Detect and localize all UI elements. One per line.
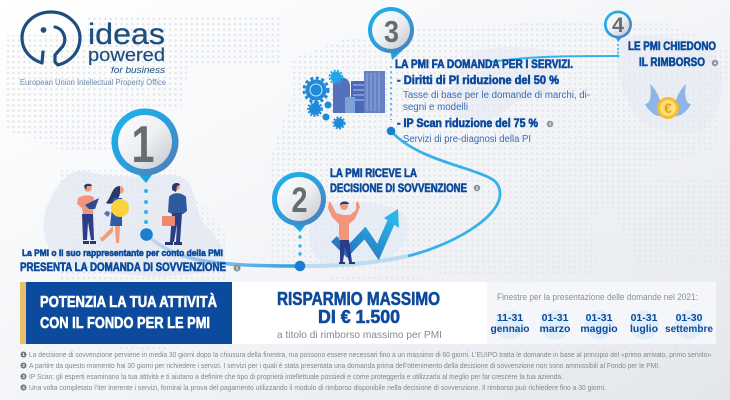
panel: maximum saving: a titolo di rimborso massimo per PMI xyxy=(277,329,442,341)
note badge 4: 4 xyxy=(714,61,717,66)
pin 3 xyxy=(368,7,414,60)
note badge 2 xyxy=(474,185,480,191)
date: settembre: 01-30 xyxy=(676,312,703,324)
footnote 3: 3 xyxy=(22,374,25,379)
step 2 text xyxy=(330,168,480,195)
logo wordmark: ideas xyxy=(88,18,165,51)
step 3 text: Servizi di pre-diagnosi della PI xyxy=(403,134,531,145)
note badge 1: 1 xyxy=(236,266,239,271)
date: luglio: 01-31 xyxy=(631,312,658,324)
date: maggio: maggio xyxy=(580,323,618,335)
pin 2: 2 xyxy=(292,181,308,220)
step 4 text xyxy=(628,41,718,69)
pin 3 connector xyxy=(387,66,395,135)
growth arrow xyxy=(334,209,399,252)
step 1 text: La PMI o il suo rappresentante per conto della PMI xyxy=(22,248,223,259)
panel: headline banner xyxy=(20,282,232,344)
step 3 text: - Diritti di PI riduzione del 50 % xyxy=(397,75,559,87)
logo xyxy=(20,12,166,87)
pin 2 xyxy=(272,172,326,232)
panel: application windows xyxy=(487,282,716,344)
pin 4: 4 xyxy=(612,14,624,37)
step 4 text: LE PMI CHIEDONO xyxy=(628,41,716,53)
step 3 text: Tasse di base per le domande di marchi, di- xyxy=(403,90,590,101)
footnote 1: 1 xyxy=(22,352,25,357)
panel: maximum saving: DI € 1.500 xyxy=(318,306,400,327)
step 4 text: IL RIMBORSO xyxy=(639,57,705,69)
step 3 text: segni e modelli xyxy=(403,102,468,113)
growth illustration xyxy=(328,201,399,264)
footnote 2: A partire da questo momento hai 30 giorni per richiedere i servizi. I servizi per i quali è stata presentata una domanda prima dell’ottenimento della decisione di sovvenzione non sono ammissibili al Fondo per le PMI. xyxy=(29,361,660,370)
date: settembre: settembre xyxy=(665,323,713,335)
pin 4 connector xyxy=(616,44,620,58)
panel: maximum saving xyxy=(232,282,487,344)
note badge 1 xyxy=(234,264,240,272)
person with briefcase xyxy=(162,183,187,244)
panel: maximum saving: RISPARMIO MASSIMO xyxy=(277,288,440,309)
people illustration xyxy=(77,183,187,244)
date: marzo xyxy=(540,310,570,340)
date: maggio xyxy=(580,310,618,340)
coin and laurel icon xyxy=(645,84,691,119)
footnotes xyxy=(20,350,713,392)
logo: powered xyxy=(88,44,165,65)
footnote 2: 2 xyxy=(22,363,25,368)
logo: for business xyxy=(111,65,165,76)
pale blobs xyxy=(43,35,723,276)
person with clipboard xyxy=(77,184,99,244)
note badge 2: 2 xyxy=(476,186,479,191)
gears xyxy=(304,70,345,129)
date: settembre xyxy=(665,310,713,340)
step 1 text xyxy=(20,248,240,274)
person with light bulb xyxy=(99,186,129,243)
note badge 3: 3 xyxy=(549,122,552,127)
flexing man xyxy=(328,201,360,264)
step 2 text: LA PMI RICEVE LA xyxy=(330,168,417,180)
pin 3: 3 xyxy=(384,14,399,49)
footnote 4: 4 xyxy=(22,385,25,390)
date: marzo: marzo xyxy=(540,323,570,335)
date: gennaio: gennaio xyxy=(490,323,530,335)
note badge 3 xyxy=(547,121,553,127)
pin 1: 1 xyxy=(132,116,154,174)
panel: headline banner: POTENZIA LA TUA ATTIVITÀ xyxy=(40,292,217,311)
pin 1 connector xyxy=(140,189,153,241)
date: gennaio xyxy=(490,310,530,340)
step 3 text xyxy=(395,59,590,145)
buildings and gears icon xyxy=(304,70,385,129)
pin 2 connector xyxy=(295,235,305,271)
footnote 3: IP Scan: gli esperti esaminano la tua attività e ti aiutano a definire che tipo di proprietà intellettuale possiedi e come proteggerla e utilizzarla al meglio per far crescere la tua azienda. xyxy=(29,372,563,381)
date: gennaio: 11-31 xyxy=(497,312,523,324)
date: maggio: 01-31 xyxy=(586,312,613,324)
step 2 text: DECISIONE DI SOVVENZIONE xyxy=(330,183,467,195)
coin and laurel icon: € xyxy=(664,100,672,116)
route path xyxy=(146,56,617,266)
step 1 text: PRESENTA LA DOMANDA DI SOVVENZIONE xyxy=(20,262,226,274)
logo: European Union Intellectual Property Office xyxy=(20,78,166,87)
date: marzo: 01-31 xyxy=(542,312,569,324)
logo ring icon xyxy=(22,12,80,65)
date: luglio: luglio xyxy=(630,323,658,335)
step 3 text: LA PMI FA DOMANDA PER I SERVIZI. xyxy=(395,59,573,71)
panel: application windows: Finestre per la presentazione delle domande nel 2021: xyxy=(497,292,698,303)
step 3 text: - IP Scan riduzione del 75 % xyxy=(397,118,538,130)
pin 4 xyxy=(604,10,632,42)
date: luglio xyxy=(630,310,658,340)
footnote 4: Una volta completato l’iter inerente i servizi, fornirai la prova del pagamento utilizzando il modulo di rimborso disponibile nella decisione di sovvenzione. Il rimborso può richiedere fino a 30 giorni. xyxy=(29,383,606,392)
pin 1 xyxy=(112,108,178,183)
panel: headline banner: CON IL FONDO PER LE PMI xyxy=(40,315,210,332)
